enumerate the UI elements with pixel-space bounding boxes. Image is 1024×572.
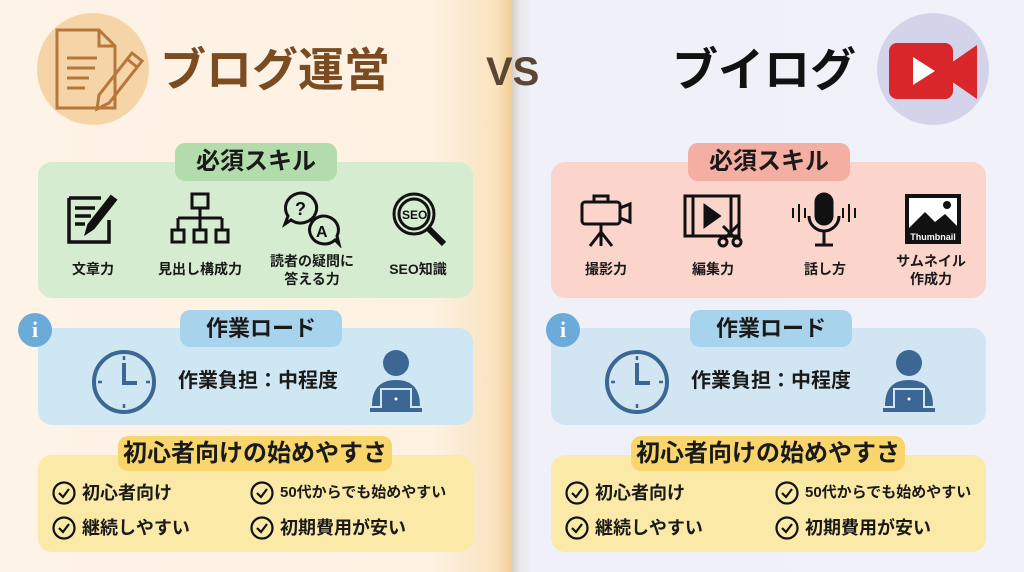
checklist: 継続しやすい bbox=[595, 518, 703, 538]
icon: thumbnail: Thumbnail bbox=[910, 232, 956, 242]
checklist: 初心者向け bbox=[82, 483, 172, 503]
checklist bbox=[52, 481, 446, 540]
icon: person laptop bbox=[883, 350, 935, 412]
heading: blog workload bbox=[180, 310, 342, 347]
panel: vlog skills: 話し方 bbox=[804, 261, 846, 277]
panel: blog beginner bbox=[38, 455, 473, 552]
checklist: 50代からでも始めやすい bbox=[805, 484, 971, 501]
panel: blog workload bbox=[38, 328, 473, 425]
checklist: 初期費用が安い bbox=[280, 518, 406, 538]
icon: camera tripod bbox=[580, 194, 632, 247]
icon: film edit bbox=[684, 194, 742, 248]
heading: blog workload: 作業ロード bbox=[206, 316, 316, 341]
panel: blog skills bbox=[38, 162, 473, 298]
icon: clock bbox=[92, 350, 156, 414]
heading: blog skills: 必須スキル bbox=[196, 148, 316, 175]
checklist: 50代からでも始めやすい bbox=[280, 484, 446, 501]
label: skills: 撮影力 bbox=[585, 261, 627, 277]
text: workload: 作業負担：中程度 bbox=[178, 370, 338, 392]
checklist: 初心者向け bbox=[595, 483, 685, 503]
icon: info bbox=[18, 313, 52, 347]
label: skills: 文章力 bbox=[72, 261, 114, 277]
icon: info: i bbox=[32, 317, 38, 342]
icon: Q&A bubbles: ? bbox=[295, 199, 306, 219]
icon: microphone bbox=[792, 192, 856, 246]
icon: hierarchy bbox=[170, 192, 230, 244]
panel: vlog beginner bbox=[551, 455, 986, 552]
heading: vlog skills bbox=[688, 143, 850, 181]
heading: vlog workload bbox=[690, 310, 852, 347]
icon: clock bbox=[605, 350, 669, 414]
icon: Q&A bubbles bbox=[282, 192, 342, 248]
icon: thumbnail bbox=[905, 194, 961, 244]
panel: blog skills: 読者の疑問に bbox=[270, 253, 354, 269]
title: vlog: ブイログ bbox=[672, 44, 856, 96]
panel: blog skills: SEO知識 bbox=[389, 261, 447, 277]
text: workload: 作業負担：中程度 bbox=[691, 370, 851, 392]
heading: vlog beginner: 初心者向けの始めやすさ bbox=[636, 440, 900, 467]
panel: vlog skills bbox=[551, 162, 986, 298]
checklist bbox=[565, 481, 971, 540]
panel: vlog skills: 作成力 bbox=[910, 271, 952, 287]
heading: vlog workload: 作業ロード bbox=[716, 316, 826, 341]
heading: blog beginner: 初心者向けの始めやすさ bbox=[123, 440, 387, 467]
icon: blog document circle bbox=[37, 13, 149, 125]
icon: info: i bbox=[560, 317, 566, 342]
heading: vlog skills: 必須スキル bbox=[709, 148, 829, 175]
icon: person laptop bbox=[370, 350, 422, 412]
panel: blog skills: 見出し構成力 bbox=[158, 261, 242, 277]
panel: vlog skills: サムネイル bbox=[896, 253, 966, 269]
icon: SEO magnifier bbox=[392, 192, 446, 246]
title: blog: ブログ運営 bbox=[160, 44, 390, 96]
checklist: 継続しやすい bbox=[82, 518, 190, 538]
icon: info bbox=[546, 313, 580, 347]
icon: Q&A bubbles: A bbox=[316, 224, 328, 241]
heading: blog skills bbox=[175, 143, 337, 181]
icon: writing bbox=[67, 194, 118, 244]
title: VS: VS bbox=[486, 50, 539, 94]
icon: SEO magnifier: SEO bbox=[402, 208, 427, 222]
panel: vlog skills: 編集力 bbox=[692, 261, 734, 277]
panel: blog skills: 答える力 bbox=[284, 271, 340, 287]
panel: vlog workload bbox=[551, 328, 986, 425]
icon: video camera circle bbox=[877, 13, 989, 125]
checklist: 初期費用が安い bbox=[805, 518, 931, 538]
